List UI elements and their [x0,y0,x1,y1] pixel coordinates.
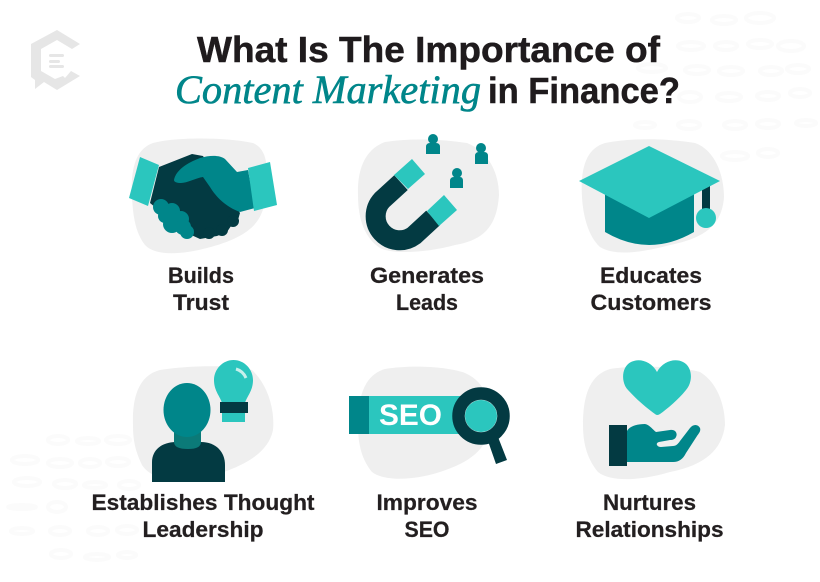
label: educates customers: Educates [600,263,702,288]
label: nurtures relationships: Relationships [576,517,724,542]
panel: nurtures relationships [576,360,725,542]
label: generates leads: Leads [396,290,458,315]
label: improves seo: SEO [404,517,450,542]
label: educates customers [590,263,712,315]
label: improves seo: Improves [376,490,478,515]
label: builds trust [168,263,234,315]
label: generates leads [370,263,484,315]
icon: person with light bulb [133,360,273,482]
panel: builds trust [129,138,277,315]
label: establishes thought leadership: Leadership [142,517,264,542]
icon: seo magnifier [349,367,507,479]
label: establishes thought leadership [92,490,315,542]
title [175,29,680,112]
label: generates leads: Generates [370,263,484,288]
panel: establishes thought leadership [92,360,315,542]
label: establishes thought leadership: Establishes Thought [92,490,315,515]
logo [31,30,80,90]
icon: graduation cap [579,139,724,253]
label: educates customers: Customers [590,290,712,315]
title: Content Marketing [175,67,481,112]
label: builds trust: Trust [173,290,230,315]
icon: seo magnifier: SEO [379,399,442,432]
title: What Is The Importance of [197,29,661,70]
label: nurtures relationships: Nurtures [603,490,696,515]
panel: educates customers [579,139,724,315]
label: nurtures relationships [576,490,724,542]
label: builds trust: Builds [168,263,234,288]
icon: heart in hand [583,360,725,479]
icon: magnet [358,134,499,252]
label: improves seo [376,490,478,542]
panel: improves seo [349,367,507,542]
panel: generates leads [358,134,499,315]
title: in Finance? [488,70,680,111]
icon: handshake [129,138,277,253]
